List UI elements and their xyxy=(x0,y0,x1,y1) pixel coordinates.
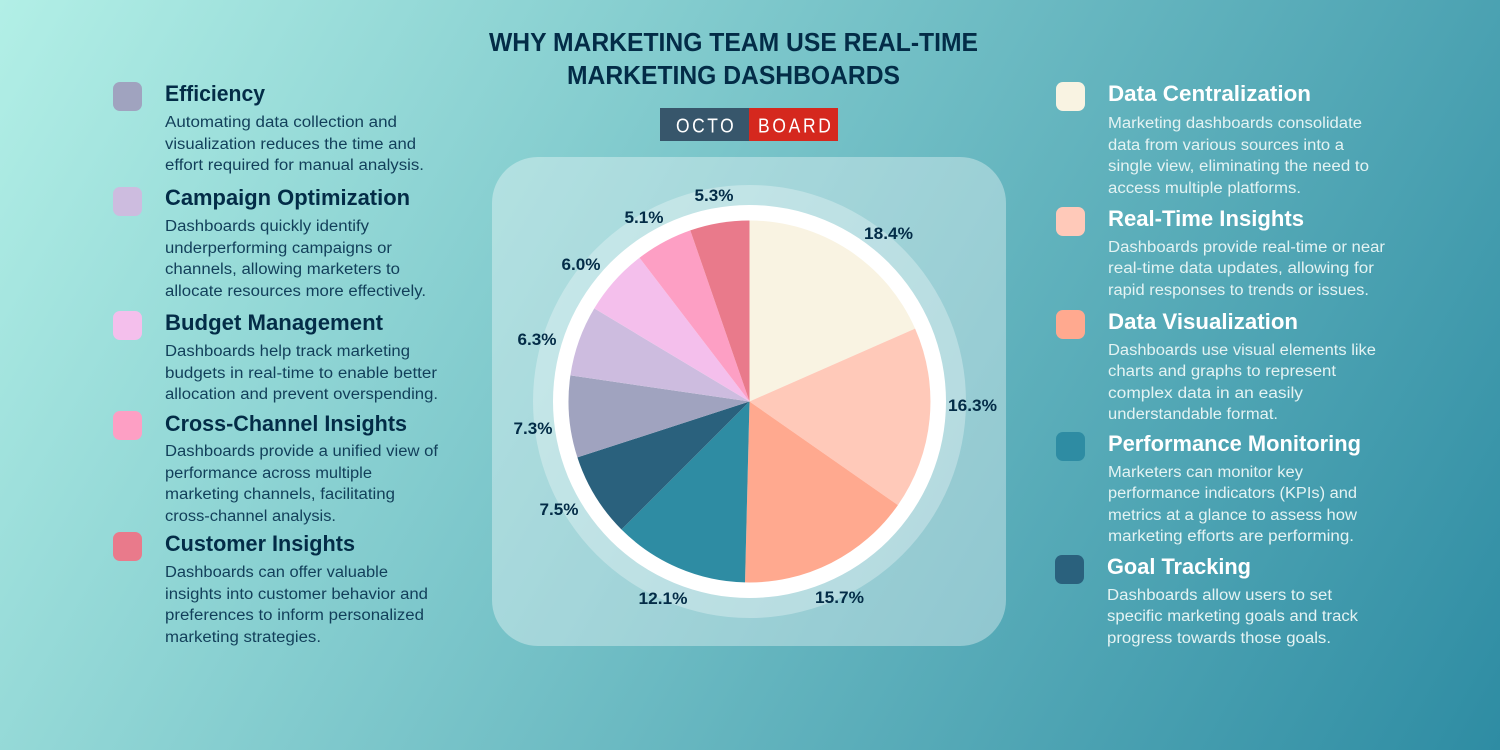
item: Data Visualization: charts and graphs to represent xyxy=(1108,363,1337,380)
item: Performance Monitoring: marketing efforts are performing. xyxy=(1108,528,1354,545)
item: Efficiency xyxy=(113,81,424,174)
item: Cross-Channel Insights: marketing channels, facilitating xyxy=(165,486,395,503)
item: Campaign Optimization: channels, allowing marketers to xyxy=(165,261,400,278)
item: Real-Time Insights: Dashboards provide real-time or near xyxy=(1108,239,1385,256)
pie chart slices xyxy=(569,220,930,582)
item: Efficiency: Efficiency xyxy=(165,81,265,106)
pie percentage labels xyxy=(514,187,997,608)
pie percentage labels: 5.1% xyxy=(624,209,664,227)
item: Data Visualization: Dashboards use visual elements like xyxy=(1108,342,1376,359)
item: Data Visualization: Data Visualization xyxy=(1108,309,1298,334)
item: Budget Management: Budget Management xyxy=(165,310,383,335)
item: Data Visualization: complex data in an easily xyxy=(1108,385,1303,402)
item: Real-Time Insights: rapid responses to trends or issues. xyxy=(1108,282,1369,299)
panel: pie chart xyxy=(492,157,1006,646)
pie white ring xyxy=(553,205,946,598)
pie percentage labels: 16.3% xyxy=(948,397,997,415)
item: Campaign Optimization: Dashboards quickly identify xyxy=(165,218,369,235)
right column xyxy=(1055,81,1385,647)
title: WHY MARKETING TEAM USE REAL-TIME xyxy=(489,27,978,57)
item: Goal Tracking: specific marketing goals and track xyxy=(1107,608,1358,625)
item: Data Centralization: access multiple platforms. xyxy=(1108,180,1301,197)
item: Performance Monitoring: metrics at a glance to assess how xyxy=(1108,507,1358,524)
logo: Octoboard xyxy=(660,108,838,141)
item: Cross-Channel Insights xyxy=(113,411,439,525)
item: Customer Insights: Customer Insights xyxy=(165,531,355,556)
item: Budget Management: allocation and prevent overspending. xyxy=(165,386,438,403)
item: Data Centralization: Marketing dashboards consolidate xyxy=(1108,115,1362,132)
item: Customer Insights: Dashboards can offer valuable xyxy=(165,564,388,581)
item: Campaign Optimization: underperforming campaigns or xyxy=(165,240,392,257)
item: Campaign Optimization: Campaign Optimization xyxy=(165,185,410,210)
title xyxy=(489,27,978,90)
item: Goal Tracking xyxy=(1055,554,1358,647)
item: Campaign Optimization xyxy=(113,185,426,300)
pie percentage labels: 18.4% xyxy=(864,225,913,243)
pie outer halo ring xyxy=(533,185,966,618)
item: Cross-Channel Insights: performance across multiple xyxy=(165,465,372,482)
item: Cross-Channel Insights: Cross-Channel Insights xyxy=(165,411,407,436)
pie percentage labels: 6.3% xyxy=(518,331,557,349)
item: Cross-Channel Insights: cross-channel analysis. xyxy=(165,508,336,525)
left column xyxy=(113,81,439,646)
item: Performance Monitoring xyxy=(1056,431,1361,545)
item: Efficiency: Automating data collection and xyxy=(165,114,397,131)
item: Performance Monitoring: performance indicators (KPIs) and xyxy=(1108,485,1357,502)
item: Cross-Channel Insights: Dashboards provide a unified view of xyxy=(165,443,439,460)
item: Customer Insights: insights into customer behavior and xyxy=(165,586,428,603)
item: Efficiency: visualization reduces the time and xyxy=(165,136,416,153)
item: Budget Management: Dashboards help track marketing xyxy=(165,343,410,360)
item: Goal Tracking: Goal Tracking xyxy=(1107,554,1251,579)
item: Goal Tracking: Dashboards allow users to set xyxy=(1107,587,1333,604)
item: Budget Management: budgets in real-time to enable better xyxy=(165,365,437,382)
item: Performance Monitoring: Performance Monitoring xyxy=(1108,431,1361,456)
item: Budget Management xyxy=(113,310,438,403)
item: Goal Tracking: progress towards those goals. xyxy=(1107,630,1331,647)
pie percentage labels: 15.7% xyxy=(815,589,864,607)
item: Customer Insights: preferences to inform personalized xyxy=(165,607,424,624)
pie percentage labels: 5.3% xyxy=(694,187,734,205)
pie percentage labels: 6.0% xyxy=(562,256,601,274)
item: Efficiency: effort required for manual analysis. xyxy=(165,157,424,174)
pie percentage labels: 7.5% xyxy=(540,501,579,519)
pie percentage labels: 7.3% xyxy=(514,420,553,438)
item: Campaign Optimization: allocate resources more effectively. xyxy=(165,283,426,300)
item: Customer Insights: marketing strategies. xyxy=(165,629,321,646)
title: MARKETING DASHBOARDS xyxy=(567,60,900,90)
pie percentage labels: 12.1% xyxy=(638,590,688,608)
item: Performance Monitoring: Marketers can monitor key xyxy=(1108,464,1303,481)
logo: Octoboard: BOARD xyxy=(758,115,834,138)
item: Customer Insights xyxy=(113,531,428,646)
item: Real-Time Insights: real-time data updates, allowing for xyxy=(1108,260,1374,277)
item: Data Visualization: understandable format. xyxy=(1108,406,1278,423)
item: Data Visualization xyxy=(1056,309,1376,423)
item: Data Centralization: data from various sources into a xyxy=(1108,137,1344,154)
item: Real-Time Insights xyxy=(1056,206,1385,299)
item: Data Centralization xyxy=(1056,81,1369,197)
item: Data Centralization: Data Centralization xyxy=(1108,81,1311,106)
item: Real-Time Insights: Real-Time Insights xyxy=(1108,206,1304,231)
item: Data Centralization: single view, eliminating the need to xyxy=(1108,158,1369,175)
logo: Octoboard: OCTO xyxy=(676,115,736,138)
